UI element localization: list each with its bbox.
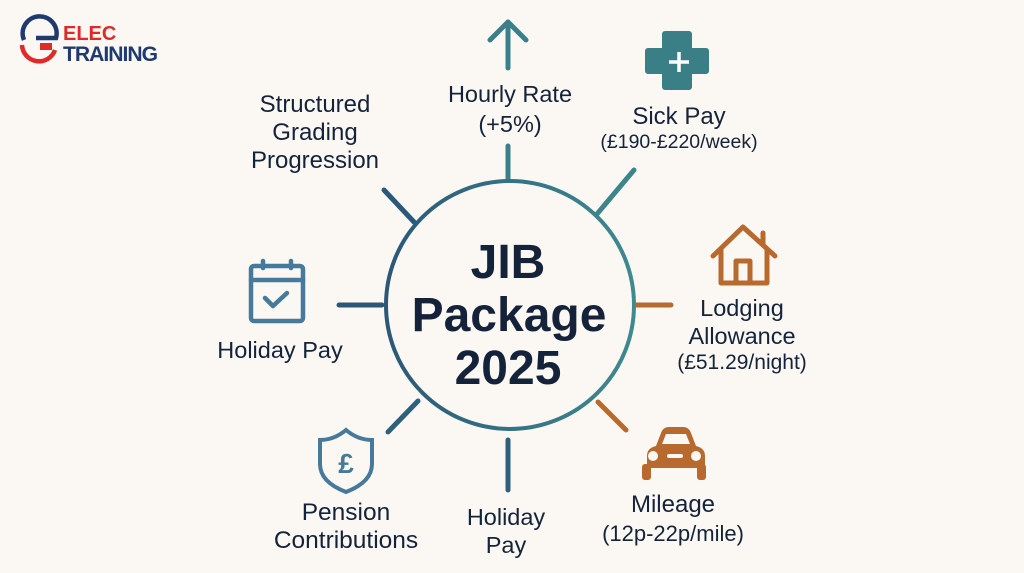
label: mileage: (12p-22p/mile) [602, 521, 744, 546]
label: pension: Contributions [274, 527, 418, 554]
label: lodging [677, 295, 807, 374]
icon: house [713, 227, 775, 283]
label: mileage: Mileage [631, 491, 715, 518]
icon: calendar [251, 261, 303, 321]
label: hourly rate: (+5%) [478, 111, 542, 137]
logo: TRAINING [63, 43, 158, 66]
label: lodging: (£51.29/night) [677, 351, 807, 374]
label: sick pay: Sick Pay [632, 103, 726, 130]
logo: ELEC [63, 23, 116, 45]
logo [22, 16, 158, 66]
icon: car [642, 427, 706, 480]
label: pension: Pension [302, 499, 390, 526]
label: hourly rate [448, 81, 572, 137]
label: structured grading: Grading [272, 119, 358, 146]
central circle: JIB [471, 236, 545, 289]
label: holiday pay bottom: Pay [486, 532, 526, 558]
label: structured grading: Structured [260, 91, 370, 118]
label: holiday pay left: Holiday Pay [217, 337, 343, 363]
icon: shield pound: £ [338, 448, 354, 479]
label: holiday pay bottom: Holiday [467, 504, 545, 530]
label: sick pay: (£190-£220/week) [600, 131, 758, 153]
label: lodging: Allowance [688, 323, 796, 349]
label: mileage [602, 491, 744, 546]
label: hourly rate: Hourly Rate [448, 81, 572, 107]
spokes [339, 146, 671, 490]
label: lodging: Lodging [700, 295, 784, 321]
icon: shield pound [320, 430, 372, 492]
central circle: Package [412, 289, 606, 342]
icon: medical cross [645, 31, 709, 90]
icon: up arrow [490, 22, 526, 68]
label: structured grading: Progression [251, 147, 379, 174]
central circle [386, 181, 634, 429]
label: pension [274, 499, 418, 554]
label: sick pay [600, 103, 758, 153]
label: structured grading [251, 91, 379, 174]
central circle: 2025 [455, 342, 561, 395]
label: holiday pay bottom [467, 504, 545, 558]
